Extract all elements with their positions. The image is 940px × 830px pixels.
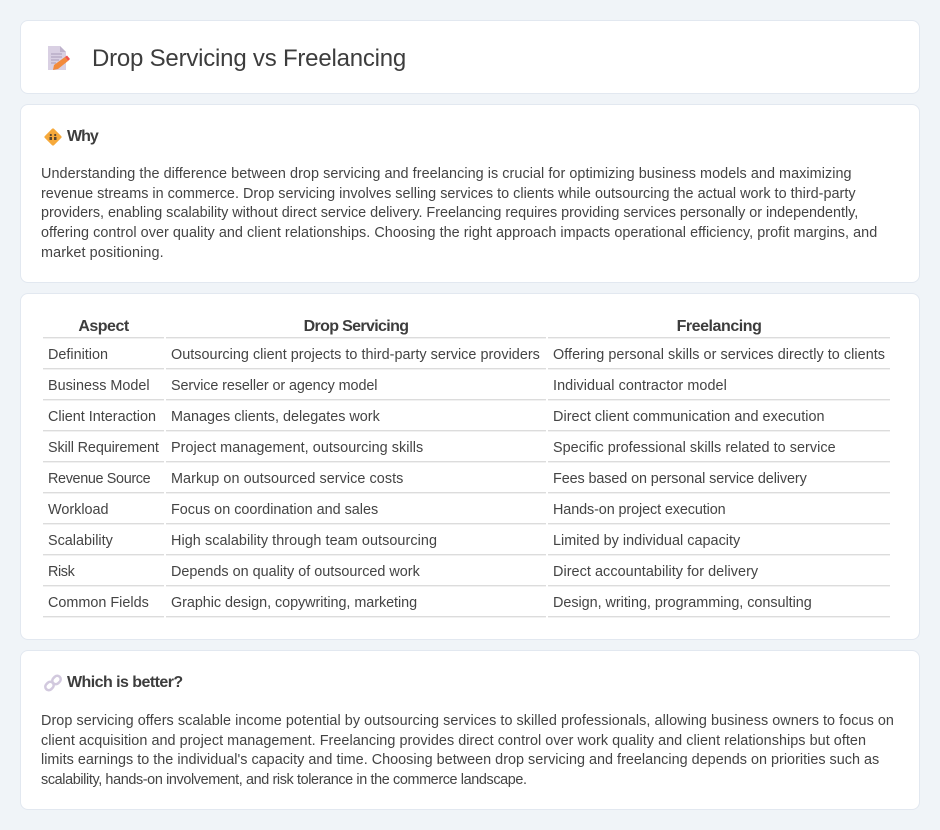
row: workload: Workload — [48, 502, 109, 518]
row: common fields — [43, 595, 890, 618]
row: scalability — [43, 533, 890, 556]
row: client interaction: Direct client communication and execution — [553, 409, 825, 425]
table header: Aspect — [78, 318, 129, 335]
row: definition: Definition — [48, 347, 108, 363]
row: definition — [43, 347, 890, 370]
text block: why explanation: offering control over quality and client relationships. Choosing the right approach impacts operational efficiency, profit margins, and — [41, 225, 877, 241]
row: skill requirement — [43, 440, 890, 463]
row: revenue source: Markup on outsourced service costs — [171, 471, 403, 487]
row: skill requirement: Skill Requirement — [48, 440, 159, 456]
row: definition: Offering personal skills or services directly to clients — [553, 347, 885, 363]
row: business model: Business Model — [48, 378, 150, 394]
row: risk: Risk — [48, 564, 74, 580]
icon: memo with pencil — [48, 46, 70, 70]
table header: Freelancing — [677, 318, 761, 335]
row: scalability: High scalability through team outsourcing — [171, 533, 437, 549]
row: scalability: Limited by individual capacity — [553, 533, 740, 549]
panel: comparison table — [20, 293, 920, 640]
row: common fields: Graphic design, copywriting, marketing — [171, 595, 417, 611]
text block: verdict: client acquisition and project management. Freelancing provides direct control over work quality and client relationships but often — [41, 733, 866, 749]
title: Drop Servicing vs Freelancing — [92, 45, 406, 72]
text block: why explanation: revenue streams in commerce. Drop servicing involves selling services to clients while outsourcing the actual work to third-party — [41, 186, 856, 202]
panel: title header — [20, 20, 920, 94]
row: common fields: Design, writing, programming, consulting — [553, 595, 812, 611]
text block: verdict: Drop servicing offers scalable income potential by outsourcing services to skilled professionals, allowing business owners to focus on — [41, 713, 894, 729]
row: workload — [43, 502, 890, 525]
row: risk: Depends on quality of outsourced work — [171, 564, 420, 580]
row: revenue source: Revenue Source — [48, 471, 150, 487]
row: business model — [43, 378, 890, 401]
text block: why explanation: Understanding the difference between drop servicing and freelancing is crucial for optimizing business models and maximizing — [41, 166, 852, 182]
row: workload: Hands-on project execution — [553, 502, 726, 518]
text block: why explanation — [41, 166, 877, 261]
row: client interaction: Manages clients, delegates work — [171, 409, 380, 425]
row: business model: Service reseller or agency model — [171, 378, 377, 394]
row: client interaction: Client Interaction — [48, 409, 156, 425]
row: scalability: Scalability — [48, 533, 113, 549]
heading: which is better: Which is better? — [67, 674, 183, 691]
icon: warning diamond — [44, 128, 62, 146]
row: workload: Focus on coordination and sales — [171, 502, 378, 518]
row: skill requirement: Project management, outsourcing skills — [171, 440, 423, 456]
text block: why explanation: providers, enabling scalability without direct service delivery. Freelancing requires providing services personally or independently, — [41, 205, 858, 221]
row: risk: Direct accountability for delivery — [553, 564, 758, 580]
row: risk — [43, 564, 890, 587]
row: client interaction — [43, 409, 890, 432]
row: revenue source: Fees based on personal service delivery — [553, 471, 807, 487]
row: business model: Individual contractor model — [553, 378, 727, 394]
panel: which is better — [20, 650, 920, 810]
row: common fields: Common Fields — [48, 595, 149, 611]
icon: link — [44, 674, 62, 692]
row: revenue source — [43, 471, 890, 494]
text block: verdict: limits earnings to the individual's capacity and time. Choosing between drop servicing and freelancing depends on priorities such as — [41, 752, 879, 768]
row: definition: Outsourcing client projects to third-party service providers — [171, 347, 540, 363]
text block: why explanation: market positioning. — [41, 245, 164, 261]
text block: verdict: scalability, hands-on involvement, and risk tolerance in the commerce landscape. — [41, 772, 527, 788]
panel: why — [20, 104, 920, 283]
table header — [43, 318, 890, 339]
row: skill requirement: Specific professional skills related to service — [553, 440, 836, 456]
table header: Drop Servicing — [304, 318, 408, 335]
text block: verdict — [41, 713, 894, 788]
heading: why: Why — [67, 128, 98, 145]
